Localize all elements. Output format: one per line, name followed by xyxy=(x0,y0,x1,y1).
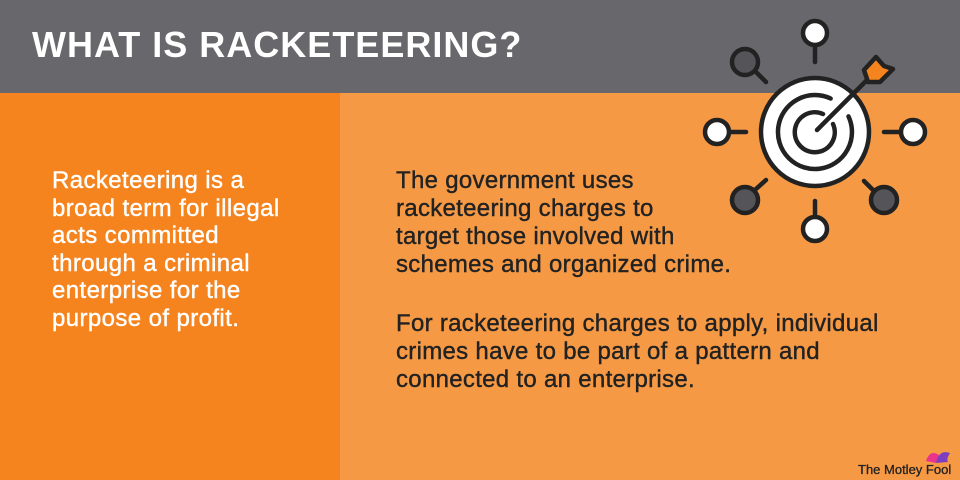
right text block: The government uses xyxy=(396,167,634,194)
right text block: schemes and organized crime. xyxy=(396,251,731,278)
right text block: connected to an enterprise. xyxy=(396,366,695,393)
right text block: racketeering charges to xyxy=(396,195,654,222)
icon: target network xyxy=(702,18,928,244)
left text block: acts committed xyxy=(52,222,219,249)
left text block: purpose of profit. xyxy=(52,304,239,332)
left text block: through a criminal xyxy=(52,250,250,276)
left text block: Racketeering is a xyxy=(52,167,244,194)
right text block xyxy=(396,167,879,393)
right text block: target those involved with xyxy=(396,223,675,250)
left text block: enterprise for the xyxy=(52,277,241,304)
title: WHAT IS RACKETEERING? xyxy=(32,24,522,65)
right text block: For racketeering charges to apply, individual xyxy=(396,310,879,337)
right text block: crimes have to be part of a pattern and xyxy=(396,338,820,365)
logo: The Motley Fool: The Motley Fool xyxy=(858,462,951,477)
header band xyxy=(0,0,960,93)
left text block: broad term for illegal xyxy=(52,194,280,222)
left panel xyxy=(0,93,340,480)
icon: jester hat xyxy=(926,452,950,463)
left text block xyxy=(52,167,280,332)
